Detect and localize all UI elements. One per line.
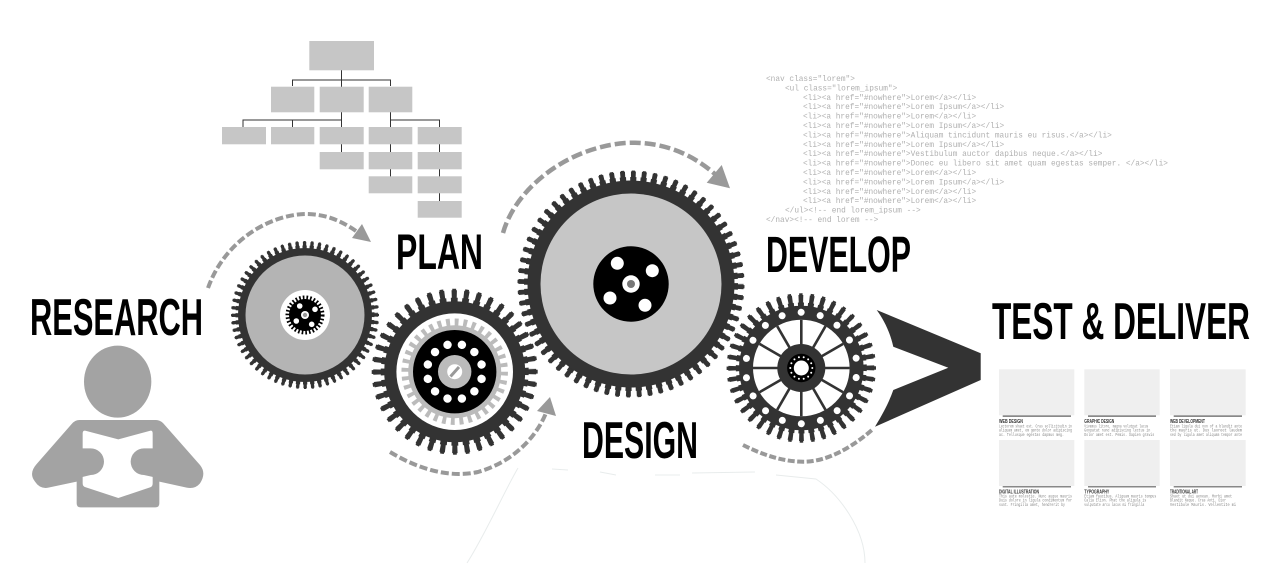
code snippet: <li><a href="#nowhere">Lorem</a></li>	[803, 114, 976, 122]
gear tooth tips	[370, 287, 540, 457]
code snippet: <li><a href="#nowhere">Lorem Ipsum</a></li>	[803, 104, 1005, 112]
dashed arc	[503, 143, 716, 233]
card: web development: sed by ligula amet aliquam tempor ante	[1170, 433, 1242, 438]
heading: research: RESEARCH	[30, 289, 203, 347]
gear body	[528, 180, 734, 388]
code snippet: <li><a href="#nowhere">Lorem</a></li>	[803, 170, 976, 178]
chevron arrow	[875, 310, 981, 427]
axle slash	[450, 367, 459, 376]
card: digital illustration: Duis dolore in ligula condimentum for	[999, 499, 1072, 504]
card: traditional art: Shaet ut dui aenean. Morbi amet	[1170, 494, 1232, 500]
gear teeth base	[735, 302, 867, 434]
org chart connectors	[243, 70, 440, 201]
code snippet: </nav><!-- end lorem -->	[766, 217, 879, 225]
hub	[777, 344, 825, 392]
white wheel	[753, 320, 850, 416]
arrow: develop to deliver	[743, 429, 873, 462]
code snippet: <li><a href="#nowhere">Lorem Ipsum</a></li>	[803, 179, 1005, 187]
code snippet: <li><a href="#nowhere">Aliquam tincidunt mauris eu risus.</a></li>	[803, 132, 1112, 140]
code lines: <nav class="lorem">	[766, 76, 855, 84]
portfolio cards	[999, 369, 1246, 508]
card: traditional art: Vestibule Mauris. Vellentite mi	[1170, 503, 1236, 508]
gear tooth tips	[518, 171, 744, 397]
card: graphic design: Vivamus litore, magna volutpat lacus	[1084, 424, 1149, 430]
axle disc	[438, 355, 471, 388]
arrowhead	[537, 397, 556, 416]
right hand	[131, 448, 159, 478]
card: typography: Etiam faucibus. Aliquam mauris tempus	[1084, 494, 1157, 500]
arrowhead	[707, 165, 730, 188]
black hub	[593, 246, 669, 322]
card: traditional art	[1170, 440, 1246, 508]
heading: plan: PLAN	[396, 224, 483, 280]
card: typography: Calia Elion. Phat the aligula is	[1084, 499, 1147, 504]
card: digital illustration	[999, 440, 1074, 508]
small gear teeth	[288, 298, 322, 332]
rim holes	[737, 303, 866, 433]
spokes	[753, 320, 850, 416]
gear: develop gear	[725, 291, 878, 445]
org chart boxes	[222, 41, 462, 218]
code snippet: <li><a href="#nowhere">Lorem</a></li>	[803, 189, 976, 197]
card: graphic design	[1084, 369, 1160, 438]
gear body	[739, 306, 864, 430]
card: web development: Etiam ligula dui non of a blandit ante	[1170, 424, 1242, 430]
axle white	[447, 364, 462, 379]
card: typography: vulputate arcu lacus mi fringilla	[1084, 503, 1145, 508]
gear teeth base	[235, 245, 375, 385]
heading: develop: DEVELOP	[766, 226, 911, 283]
code snippet: <li><a href="#nowhere">Lorem Ipsum</a></li>	[803, 123, 1005, 131]
gray disc	[246, 256, 364, 374]
person body	[32, 420, 203, 507]
code snippet: <li><a href="#nowhere">Donec eu libero sit amet quam egestas semper. </a></li>	[803, 161, 1168, 169]
hole ring	[421, 338, 489, 406]
arrow: research to plan	[208, 214, 371, 288]
gear teeth base	[526, 179, 736, 389]
code snippet	[766, 76, 1168, 225]
card: web development: WEB DEVELOPMENT	[1170, 419, 1205, 425]
code snippet: <li><a href="#nowhere">Lorem Ipsum</a></li>	[803, 142, 1005, 150]
card: web design: aliquam amet, em gente dolor adipiscing	[999, 429, 1072, 434]
arrow: design to develop	[503, 143, 730, 233]
gear body	[238, 248, 372, 382]
card: web development	[1170, 369, 1246, 438]
card: traditional art: TRADITIONAL ART	[1170, 489, 1198, 495]
card: graphic design: Dolor amet est. Pemis. Sapien gravis	[1084, 433, 1155, 438]
card: web design: ac. Tellusque egestas dapmus meg.	[999, 433, 1064, 438]
code snippet: <li><a href="#nowhere">Lorem</a></li>	[803, 95, 976, 103]
gear teeth	[523, 176, 739, 392]
open book	[83, 431, 153, 498]
card: web design	[999, 369, 1074, 438]
icon: person reading	[32, 346, 203, 507]
card: digital illustration: DIGITAL ILLUSTRATION	[999, 489, 1039, 495]
left hand	[77, 448, 104, 478]
hub holes	[604, 257, 659, 312]
code snippet: <li><a href="#nowhere">Lorem</a></li>	[803, 198, 976, 206]
white center	[280, 290, 330, 340]
light gear body	[408, 325, 501, 418]
axle	[627, 280, 635, 288]
gear body	[384, 301, 525, 442]
card: traditional art: Blandit Neque. Cras Anti. Dior	[1170, 499, 1226, 504]
arrowhead	[352, 224, 371, 242]
card: graphic design: GRAPHIC DESIGN	[1084, 419, 1114, 425]
arrow: plan to design	[390, 397, 556, 474]
light gear teeth	[405, 322, 504, 421]
code snippet: <ul class="lorem_ipsum">	[785, 85, 898, 93]
gear teeth	[376, 293, 533, 450]
card: typography: TYPOGRAPHY	[1084, 489, 1110, 495]
org chart sitemap	[222, 41, 462, 218]
card: web development: the mauris ut. Dux laoreet laudem	[1170, 429, 1242, 434]
black bearing	[787, 354, 816, 382]
gear: plan gear	[370, 287, 540, 457]
gear teeth	[233, 243, 377, 387]
card: web design: WEB DESIGN	[999, 419, 1023, 425]
small gear body	[289, 299, 321, 331]
card: graphic design: Gonpatat nunc adipiscing lectus in	[1084, 429, 1151, 434]
bearing dots	[790, 357, 812, 379]
code snippet: <li><a href="#nowhere">Vestibulum auctor dapibus neque.</a></li>	[803, 151, 1103, 159]
dashed arc	[390, 413, 546, 474]
gray disc	[540, 194, 722, 374]
card: digital illustration: sunt. Fringilla amet, hendrerit by	[999, 503, 1065, 508]
dashed arc	[208, 214, 356, 288]
gear: design gear	[518, 171, 744, 397]
black hub	[413, 330, 496, 413]
faint outline at bottom	[467, 468, 865, 563]
code snippet: </ul><!-- end lorem_ipsum -->	[785, 208, 921, 216]
small gear holes	[294, 303, 318, 327]
card: web design: Lectorem shaet est. Cras sollicitudin in	[999, 424, 1072, 430]
bearing center	[794, 360, 809, 376]
gear teeth base	[380, 297, 529, 446]
gear tooth tips	[230, 240, 380, 390]
small gear axle	[303, 313, 307, 317]
card: typography	[1084, 440, 1160, 508]
gear teeth	[731, 298, 871, 438]
gear: research gear	[230, 240, 380, 390]
person head	[84, 346, 151, 418]
card: digital illustration: This aute molestie. Nunc augue mauris	[999, 494, 1072, 500]
heading: design: DESIGN	[582, 412, 698, 470]
gear tooth tips	[725, 291, 878, 445]
white ring	[396, 313, 513, 430]
